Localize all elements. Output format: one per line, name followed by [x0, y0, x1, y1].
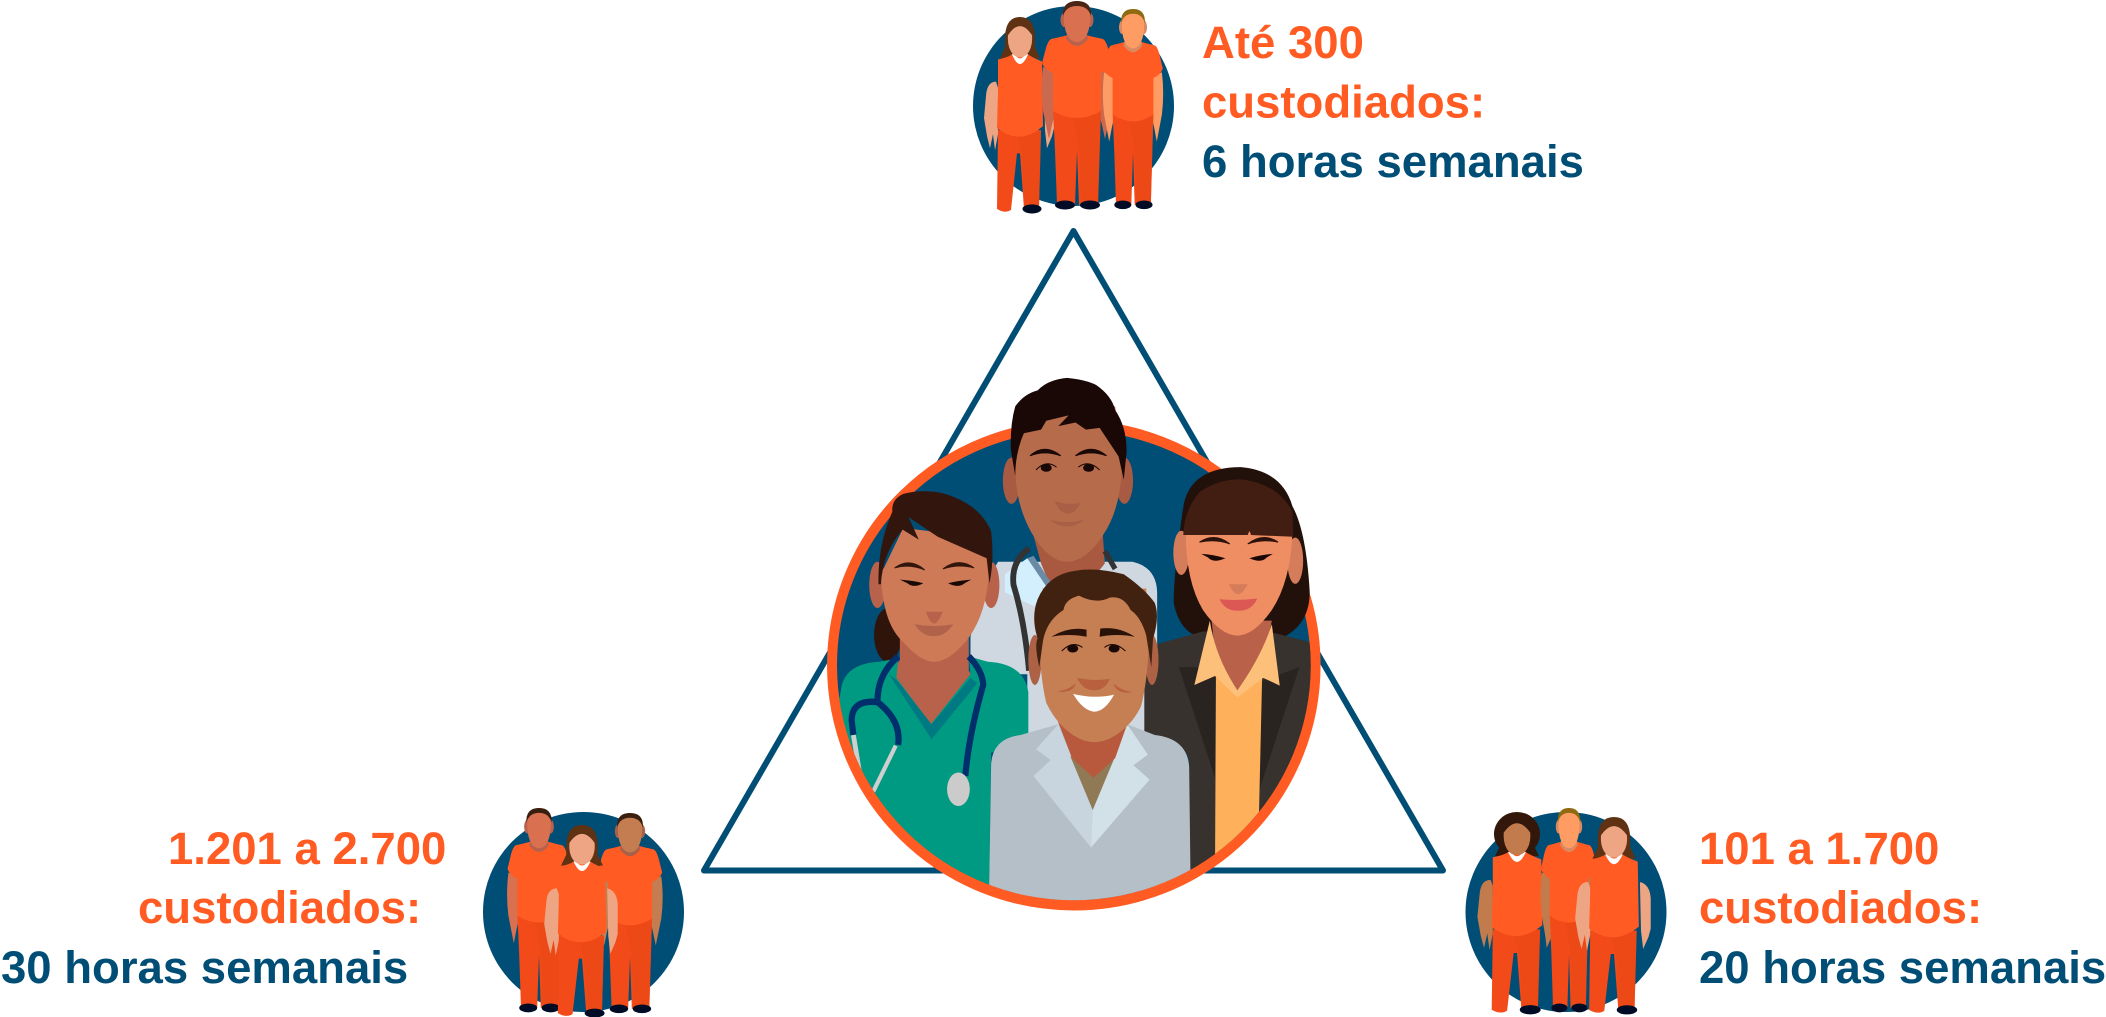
top group: inmates icon	[973, 1, 1174, 213]
bottom-right label	[1699, 823, 2106, 993]
top label: 6 horas semanais	[1202, 136, 1584, 187]
bottom-left label: custodiados:	[138, 882, 421, 933]
top label: Até 300	[1202, 17, 1364, 68]
bottom-left label: 1.201 a 2.700	[168, 823, 446, 874]
bottom-left label	[1, 823, 446, 993]
top label: custodiados:	[1202, 76, 1485, 128]
doctor at the back	[970, 378, 1157, 737]
top label	[1202, 17, 1584, 187]
nurse in green scrubs	[834, 491, 1028, 910]
central circle with orange ring	[832, 425, 1316, 905]
triangle	[704, 231, 1443, 870]
bottom-right label: 101 a 1.700	[1699, 823, 1939, 874]
smiling man in grey coat	[989, 569, 1191, 910]
woman in dark blazer	[1144, 467, 1311, 870]
bottom-left label: 30 horas semanais	[1, 942, 408, 993]
bottom-right label: 20 horas semanais	[1699, 942, 2106, 993]
bottom-right group: inmates icon	[1466, 808, 1666, 1014]
bottom-right label: custodiados:	[1699, 882, 1982, 933]
central team illustration	[832, 378, 1323, 910]
bottom-left group: inmates icon	[483, 808, 684, 1017]
